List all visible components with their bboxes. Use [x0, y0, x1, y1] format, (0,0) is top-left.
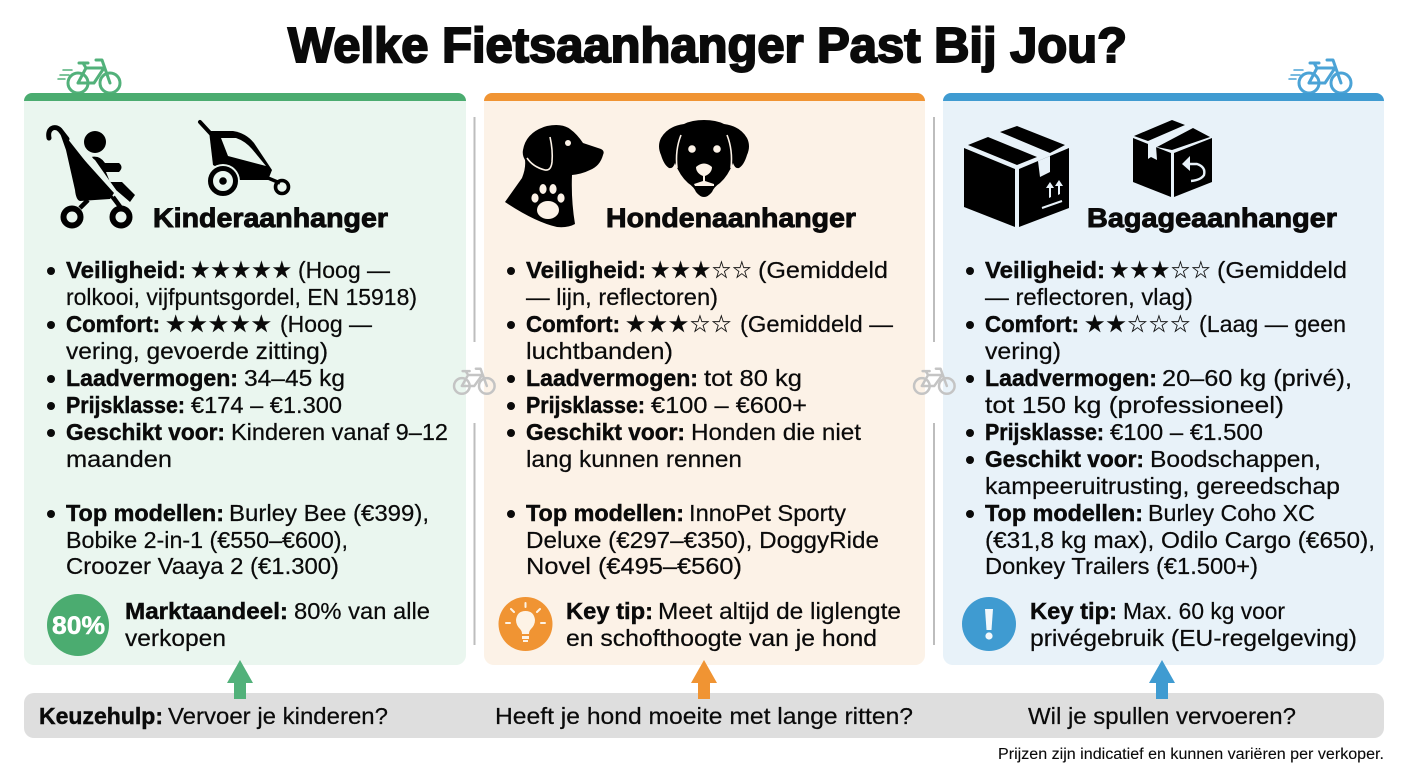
- item: prijsklasse: €100 – €1.500: [1110, 419, 1263, 445]
- item: prijsklasse: Prijsklasse:: [66, 392, 185, 418]
- callout: key tip: privégebruik (EU-regelgeving): [1030, 625, 1357, 651]
- badge: 80% market share: [47, 594, 109, 656]
- callout: key tip: Key tip:: [566, 598, 653, 624]
- item: veiligheid: [47, 256, 417, 310]
- item: comfort: (Laag — geen: [1199, 311, 1346, 337]
- item: comfort: ★★★★★: [165, 310, 272, 338]
- item: veiligheid: rolkooi, vijfpuntsgordel, EN 15918): [66, 284, 417, 310]
- item: laadvermogen: tot 150 kg (professioneel): [985, 392, 1284, 418]
- item: comfort: [47, 310, 372, 364]
- callout: key tip: Max. 60 kg voor: [1123, 598, 1285, 624]
- callout: key tip: [566, 598, 901, 651]
- icon: return box: [1133, 120, 1212, 197]
- item: top modellen: Top modellen:: [985, 500, 1143, 526]
- item: veiligheid: [507, 256, 888, 310]
- title: Welke Fietsaanhanger Past Bij Jou?: [288, 19, 1127, 73]
- item: geschikt voor: [47, 419, 448, 472]
- callout: marktaandeel: [125, 598, 430, 651]
- item: geschikt voor: Honden die niet: [691, 419, 861, 445]
- item: prijsklasse: [966, 419, 1263, 445]
- item: veiligheid: ★★★☆☆: [650, 256, 752, 284]
- item: veiligheid: — reflectoren, vlag): [985, 284, 1193, 310]
- item: laadvermogen: Laadvermogen:: [985, 365, 1157, 391]
- item: comfort: vering, gevoerde zitting): [66, 338, 328, 364]
- callout: marktaandeel: Marktaandeel:: [125, 598, 288, 624]
- arrow: blue: [1149, 660, 1175, 699]
- icon: blue bicycle: [1289, 60, 1351, 93]
- heading: Kinderaanhanger: Kinderaanhanger: [153, 203, 389, 233]
- item: laadvermogen: [966, 365, 1352, 418]
- item: laadvermogen: Laadvermogen:: [66, 365, 238, 391]
- decision: kinderen: Vervoer je kinderen?: [168, 703, 388, 729]
- item: geschikt voor: lang kunnen rennen: [526, 446, 742, 472]
- panel: hondenaanhanger: [484, 93, 925, 665]
- item: top modellen: Deluxe (€297–€350), DoggyRide: [526, 527, 879, 553]
- item: comfort: ★★☆☆☆: [1084, 310, 1191, 338]
- item: top modellen: InnoPet Sporty: [689, 500, 846, 526]
- item: geschikt voor: maanden: [66, 446, 172, 472]
- callout: marktaandeel: verkopen: [125, 625, 226, 651]
- list: bagageaanhanger specs: [966, 256, 1375, 579]
- icon: green bicycle: [58, 60, 120, 93]
- heading: Hondenaanhanger: Hondenaanhanger: [606, 203, 857, 233]
- item: laadvermogen: 20–60 kg (privé),: [1162, 365, 1352, 391]
- item: prijsklasse: Prijsklasse:: [985, 419, 1104, 445]
- item: geschikt voor: Geschikt voor:: [985, 446, 1144, 472]
- arrow: green: [227, 660, 253, 699]
- icon: grey bicycle right divider: [914, 369, 955, 394]
- item: geschikt voor: [966, 446, 1340, 499]
- item: veiligheid: ★★★☆☆: [1109, 256, 1211, 284]
- item: geschikt voor: kampeeruitrusting, gereedschap: [985, 473, 1340, 499]
- item: comfort: vering): [985, 338, 1061, 364]
- item: geschikt voor: Boodschappen,: [1150, 446, 1321, 472]
- item: top modellen: Burley Bee (€399),: [229, 500, 429, 526]
- item: geschikt voor: Kinderen vanaf 9–12: [231, 419, 448, 445]
- item: comfort: [966, 310, 1346, 364]
- icon: stroller with child: [49, 128, 135, 226]
- panel top bar: green: [24, 93, 466, 101]
- callout: key tip: Meet altijd de liglengte: [658, 598, 901, 624]
- item: prijsklasse: Prijsklasse:: [526, 392, 645, 418]
- item: comfort: Comfort:: [985, 311, 1079, 337]
- item: laadvermogen: Laadvermogen:: [526, 365, 698, 391]
- item: veiligheid: (Gemiddeld: [758, 257, 888, 283]
- heading: Bagageaanhanger: Bagageaanhanger: [1087, 203, 1338, 233]
- decision bar: [24, 693, 1384, 738]
- item: geschikt voor: Geschikt voor:: [66, 419, 225, 445]
- item: laadvermogen: [507, 365, 802, 391]
- icon: light bulb: [498, 597, 552, 651]
- item: prijsklasse: €174 – €1.300: [191, 392, 342, 418]
- item: laadvermogen: 34–45 kg: [244, 365, 345, 391]
- icon: large box: [964, 126, 1069, 227]
- item: veiligheid: (Gemiddeld: [1217, 257, 1347, 283]
- callout: key tip: en schofthoogte van je hond: [566, 625, 877, 651]
- item: comfort: (Gemiddeld —: [740, 311, 894, 337]
- icon: dog profile with paw: [505, 125, 604, 227]
- panel top bar: orange: [484, 93, 925, 101]
- icon: child bike trailer: [200, 122, 288, 198]
- item: geschikt voor: [507, 419, 861, 472]
- list: kinderaanhanger specs: [47, 256, 448, 579]
- item: veiligheid: — lijn, reflectoren): [526, 284, 718, 310]
- item: comfort: (Hoog —: [280, 311, 372, 337]
- item: laadvermogen: tot 80 kg: [704, 365, 802, 391]
- item: veiligheid: (Hoog —: [298, 257, 390, 283]
- item: top modellen: (€31,8 kg max), Odilo Cargo (€650),: [985, 527, 1375, 553]
- item: veiligheid: [966, 256, 1347, 310]
- item: prijsklasse: €100 – €600+: [651, 392, 807, 418]
- list: hondenaanhanger specs: [507, 256, 894, 579]
- callout: key tip: Key tip:: [1030, 598, 1117, 624]
- item: comfort: Comfort:: [526, 311, 620, 337]
- item: top modellen: Bobike 2-in-1 (€550–€600),: [66, 527, 348, 553]
- icon: dog face: [659, 120, 749, 197]
- footnote: Prijzen zijn indicatief en kunnen variëren per verkoper.: [998, 746, 1384, 763]
- callout: marktaandeel: 80% van alle: [294, 598, 430, 624]
- item: veiligheid: Veiligheid:: [526, 257, 646, 283]
- item: prijsklasse: [47, 392, 342, 418]
- item: top modellen: Top modellen:: [526, 500, 684, 526]
- badge: 80% market share: 80%: [52, 612, 105, 640]
- arrow: orange: [691, 660, 717, 699]
- item: geschikt voor: Geschikt voor:: [526, 419, 685, 445]
- icon: grey bicycle left divider: [454, 369, 495, 394]
- decision: kinderen: Keuzehulp:: [39, 703, 163, 729]
- icon: exclamation mark: [962, 597, 1016, 651]
- item: top modellen: Novel (€495–€560): [526, 553, 742, 579]
- item: veiligheid: Veiligheid:: [985, 257, 1105, 283]
- panel top bar: blue: [943, 93, 1384, 101]
- item: top modellen: Top modellen:: [66, 500, 224, 526]
- item: veiligheid: Veiligheid:: [66, 257, 186, 283]
- decision: hond: Heeft je hond moeite met lange ritten?: [495, 703, 913, 729]
- item: top modellen: Burley Coho XC: [1148, 500, 1315, 526]
- item: top modellen: [966, 500, 1375, 579]
- item: comfort: ★★★☆☆: [625, 310, 732, 338]
- item: top modellen: [47, 500, 429, 579]
- item: veiligheid: ★★★★★: [190, 256, 292, 284]
- panel: kinderaanhanger: [24, 93, 466, 665]
- item: top modellen: Croozer Vaaya 2 (€1.300): [66, 553, 339, 579]
- decision: spullen: Wil je spullen vervoeren?: [1028, 703, 1296, 729]
- item: top modellen: [507, 500, 879, 579]
- item: laadvermogen: [47, 365, 345, 391]
- item: comfort: Comfort:: [66, 311, 160, 337]
- panel: bagageaanhanger: [943, 93, 1384, 665]
- item: top modellen: Donkey Trailers (€1.500+): [985, 553, 1258, 579]
- decision: kinderen: [39, 703, 388, 729]
- callout: key tip: [1030, 598, 1357, 651]
- item: comfort: [507, 310, 894, 364]
- item: comfort: luchtbanden): [526, 338, 673, 364]
- item: prijsklasse: [507, 392, 807, 418]
